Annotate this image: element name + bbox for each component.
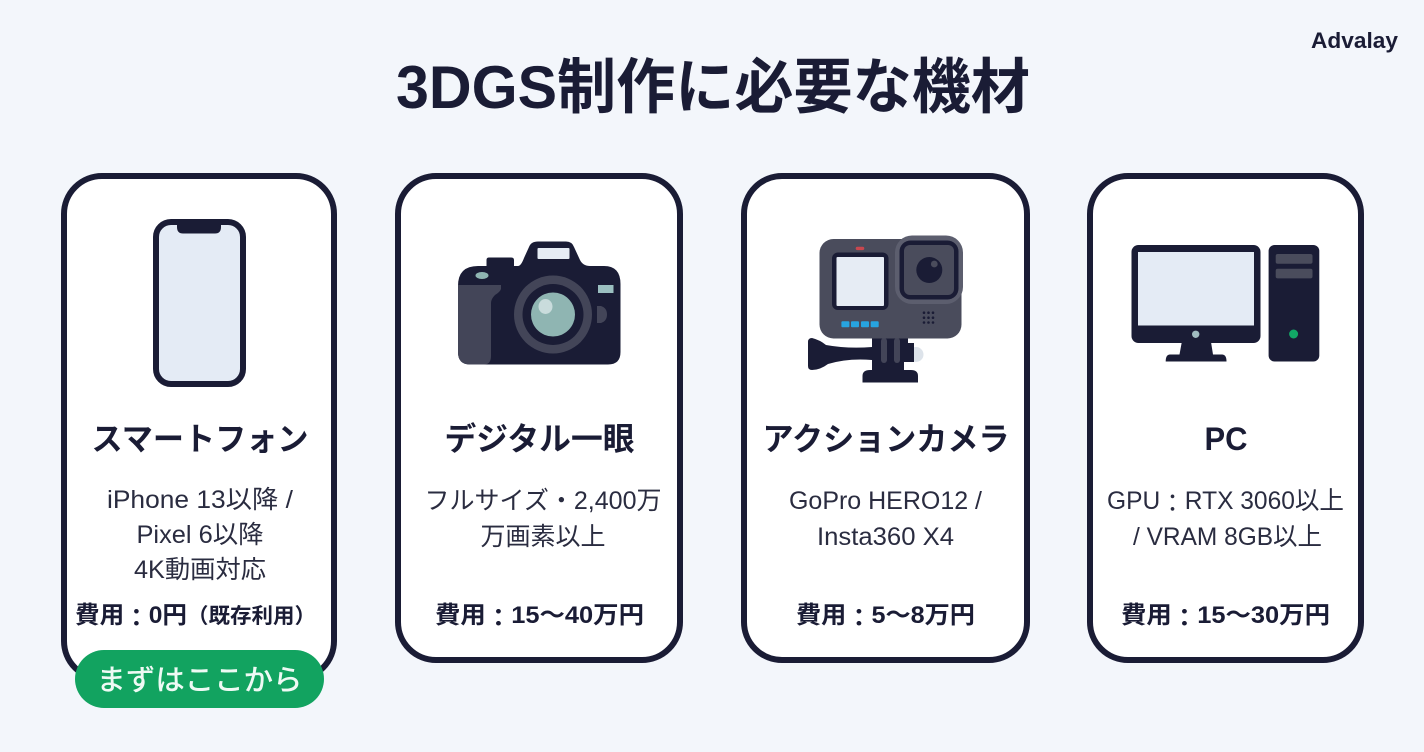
spec text: PC: GPU bbox=[1107, 487, 1161, 515]
spec text: smartphone: 4K動画対応 bbox=[134, 556, 266, 584]
cost: PC: ： bbox=[1172, 605, 1197, 632]
cost: digital SLR: ： bbox=[486, 605, 511, 632]
cost: action camera: ： bbox=[846, 605, 871, 632]
heading: action camera: アクションカメラ bbox=[762, 421, 1010, 457]
badge: start here bbox=[75, 650, 324, 708]
cost: smartphone: 費用 bbox=[75, 602, 123, 629]
cost: PC: 15〜30万円 bbox=[1197, 602, 1330, 629]
panel: smartphone bbox=[64, 176, 334, 679]
panel: action camera bbox=[744, 176, 1027, 660]
spec text: digital SLR bbox=[424, 487, 662, 551]
cost: digital SLR: 費用 bbox=[435, 602, 483, 629]
cost: digital SLR: 15〜40万円 bbox=[511, 602, 644, 629]
cost: smartphone: （既存利用） bbox=[187, 605, 316, 628]
spec text: digital SLR: フルサイズ・2,400万 bbox=[424, 487, 662, 515]
icon: camera bbox=[458, 242, 620, 364]
spec text: smartphone: iPhone 13以降 / bbox=[107, 486, 293, 514]
heading: digital SLR: デジタル一眼 bbox=[444, 421, 634, 457]
spec text: smartphone bbox=[107, 486, 293, 584]
cost: smartphone: ： bbox=[124, 605, 149, 632]
spec text: PC bbox=[1107, 487, 1344, 551]
spec text: PC: ： bbox=[1160, 490, 1185, 518]
title: 3DGS制作に必要な機材 bbox=[396, 54, 1030, 121]
spec text: PC: / VRAM 8GB以上 bbox=[1133, 523, 1322, 551]
icon: smartphone bbox=[156, 222, 243, 384]
icon: PC bbox=[1132, 245, 1319, 362]
icon: action camera bbox=[808, 236, 963, 382]
heading: smartphone: スマートフォン bbox=[92, 421, 308, 457]
spec text: digital SLR: 万画素以上 bbox=[480, 523, 606, 551]
cost: action camera: 費用 bbox=[796, 602, 844, 629]
brand logo: Advalay bbox=[1311, 28, 1399, 53]
spec text: PC: RTX 3060以上 bbox=[1185, 487, 1344, 515]
panel: digital SLR bbox=[398, 176, 680, 660]
badge: start here: まずはここから bbox=[96, 664, 302, 697]
cost: smartphone: 0円 bbox=[149, 602, 187, 629]
spec text: action camera bbox=[789, 487, 982, 551]
panel: PC bbox=[1090, 176, 1361, 660]
spec text: smartphone: Pixel 6以降 bbox=[136, 521, 264, 549]
heading: PC: PC bbox=[1204, 421, 1248, 457]
spec text: action camera: GoPro HERO12 / bbox=[789, 487, 982, 515]
cost: action camera: 5〜8万円 bbox=[871, 602, 975, 629]
cost: PC: 費用 bbox=[1121, 602, 1169, 629]
spec text: action camera: Insta360 X4 bbox=[817, 523, 954, 551]
